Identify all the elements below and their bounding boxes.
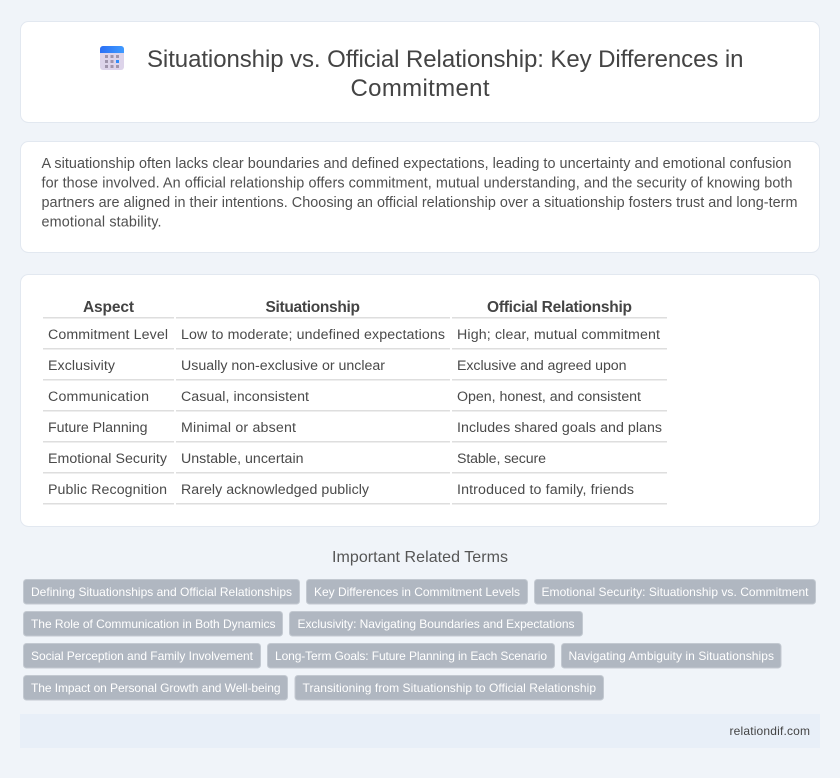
row: commitment level: High; clear, mutual commitment — [457, 327, 660, 343]
text block: intro: partners are aligned in their intentions. Choosing an official relationship over a situationship fosters trust and long-term — [42, 195, 798, 211]
tag — [24, 676, 288, 700]
tag: Navigating Ambiguity in Situationships — [568, 649, 774, 663]
tag — [24, 612, 282, 636]
title: Commitment — [350, 75, 490, 102]
row: future planning: Minimal or absent — [181, 420, 296, 436]
tag: Exclusivity: Navigating Boundaries and Expectations — [298, 617, 574, 631]
tag: Key Differences in Commitment Levels — [314, 585, 520, 599]
tag: Transitioning from Situationship to Official Relationship — [302, 681, 596, 695]
text block: intro: for those involved. An official relationship offers commitment, mutual understanding, and the security of knowing both — [42, 176, 792, 192]
row: commitment level — [48, 327, 660, 343]
panel: title header — [20, 22, 820, 122]
row: communication — [48, 389, 641, 405]
tag — [290, 612, 582, 636]
row: future planning: Includes shared goals and plans — [457, 420, 662, 436]
tag: Social Perception and Family Involvement — [31, 649, 254, 663]
tag: Emotional Security: Situationship vs. Commitment — [542, 585, 809, 599]
row: public recognition: Introduced to family, friends — [457, 482, 634, 498]
row: exclusivity: Usually non-exclusive or unclear — [181, 358, 385, 374]
tag — [24, 644, 260, 668]
tag — [295, 676, 604, 700]
tag: The Role of Communication in Both Dynamics — [31, 617, 276, 631]
row: exclusivity: Exclusive and agreed upon — [457, 358, 626, 374]
row: emotional security: Stable, secure — [457, 451, 546, 467]
row: communication: Communication — [48, 389, 149, 405]
row: future planning: Future Planning — [48, 420, 148, 436]
heading: related terms: Important Related Terms — [332, 549, 508, 566]
tag — [534, 580, 816, 604]
tag — [268, 644, 554, 668]
table header: Situationship — [266, 299, 360, 316]
row: emotional security: Unstable, uncertain — [181, 451, 304, 467]
tag: The Impact on Personal Growth and Well-being — [31, 681, 280, 695]
row: emotional security — [48, 451, 546, 467]
row: public recognition: Public Recognition — [48, 482, 167, 498]
tag — [24, 580, 300, 604]
related terms tags — [24, 580, 816, 700]
table header: Aspect — [83, 299, 134, 316]
row: communication: Casual, inconsistent — [181, 389, 309, 405]
row: emotional security: Emotional Security — [48, 451, 168, 467]
row: future planning — [48, 420, 662, 436]
tag: Long-Term Goals: Future Planning in Each Scenario — [275, 649, 547, 663]
text block: intro: A situationship often lacks clear boundaries and defined expectations, leading to uncertainty and emotional confusion — [42, 156, 792, 172]
title: Situationship vs. Official Relationship: Key Differences in — [147, 46, 744, 73]
footer: relationdif.com — [730, 724, 810, 738]
tag — [562, 644, 781, 668]
table header — [83, 299, 632, 316]
title — [147, 46, 744, 102]
row: commitment level: Low to moderate; undefined expectations — [181, 327, 445, 343]
row: public recognition — [48, 482, 634, 498]
text block: intro — [42, 156, 798, 230]
panel: intro paragraph — [20, 142, 820, 252]
text block: intro: emotional stability. — [42, 214, 162, 230]
row: exclusivity — [48, 358, 626, 374]
row: commitment level: Commitment Level — [48, 327, 168, 343]
tag: Defining Situationships and Official Relationships — [31, 585, 292, 599]
row: exclusivity: Exclusivity — [48, 358, 116, 374]
tag — [306, 580, 528, 604]
row: public recognition: Rarely acknowledged publicly — [181, 482, 370, 498]
table header: Official Relationship — [487, 299, 632, 316]
row: communication: Open, honest, and consistent — [457, 389, 641, 405]
footer — [20, 714, 820, 748]
panel: comparison table — [20, 274, 820, 526]
icon: calendar — [100, 46, 124, 70]
